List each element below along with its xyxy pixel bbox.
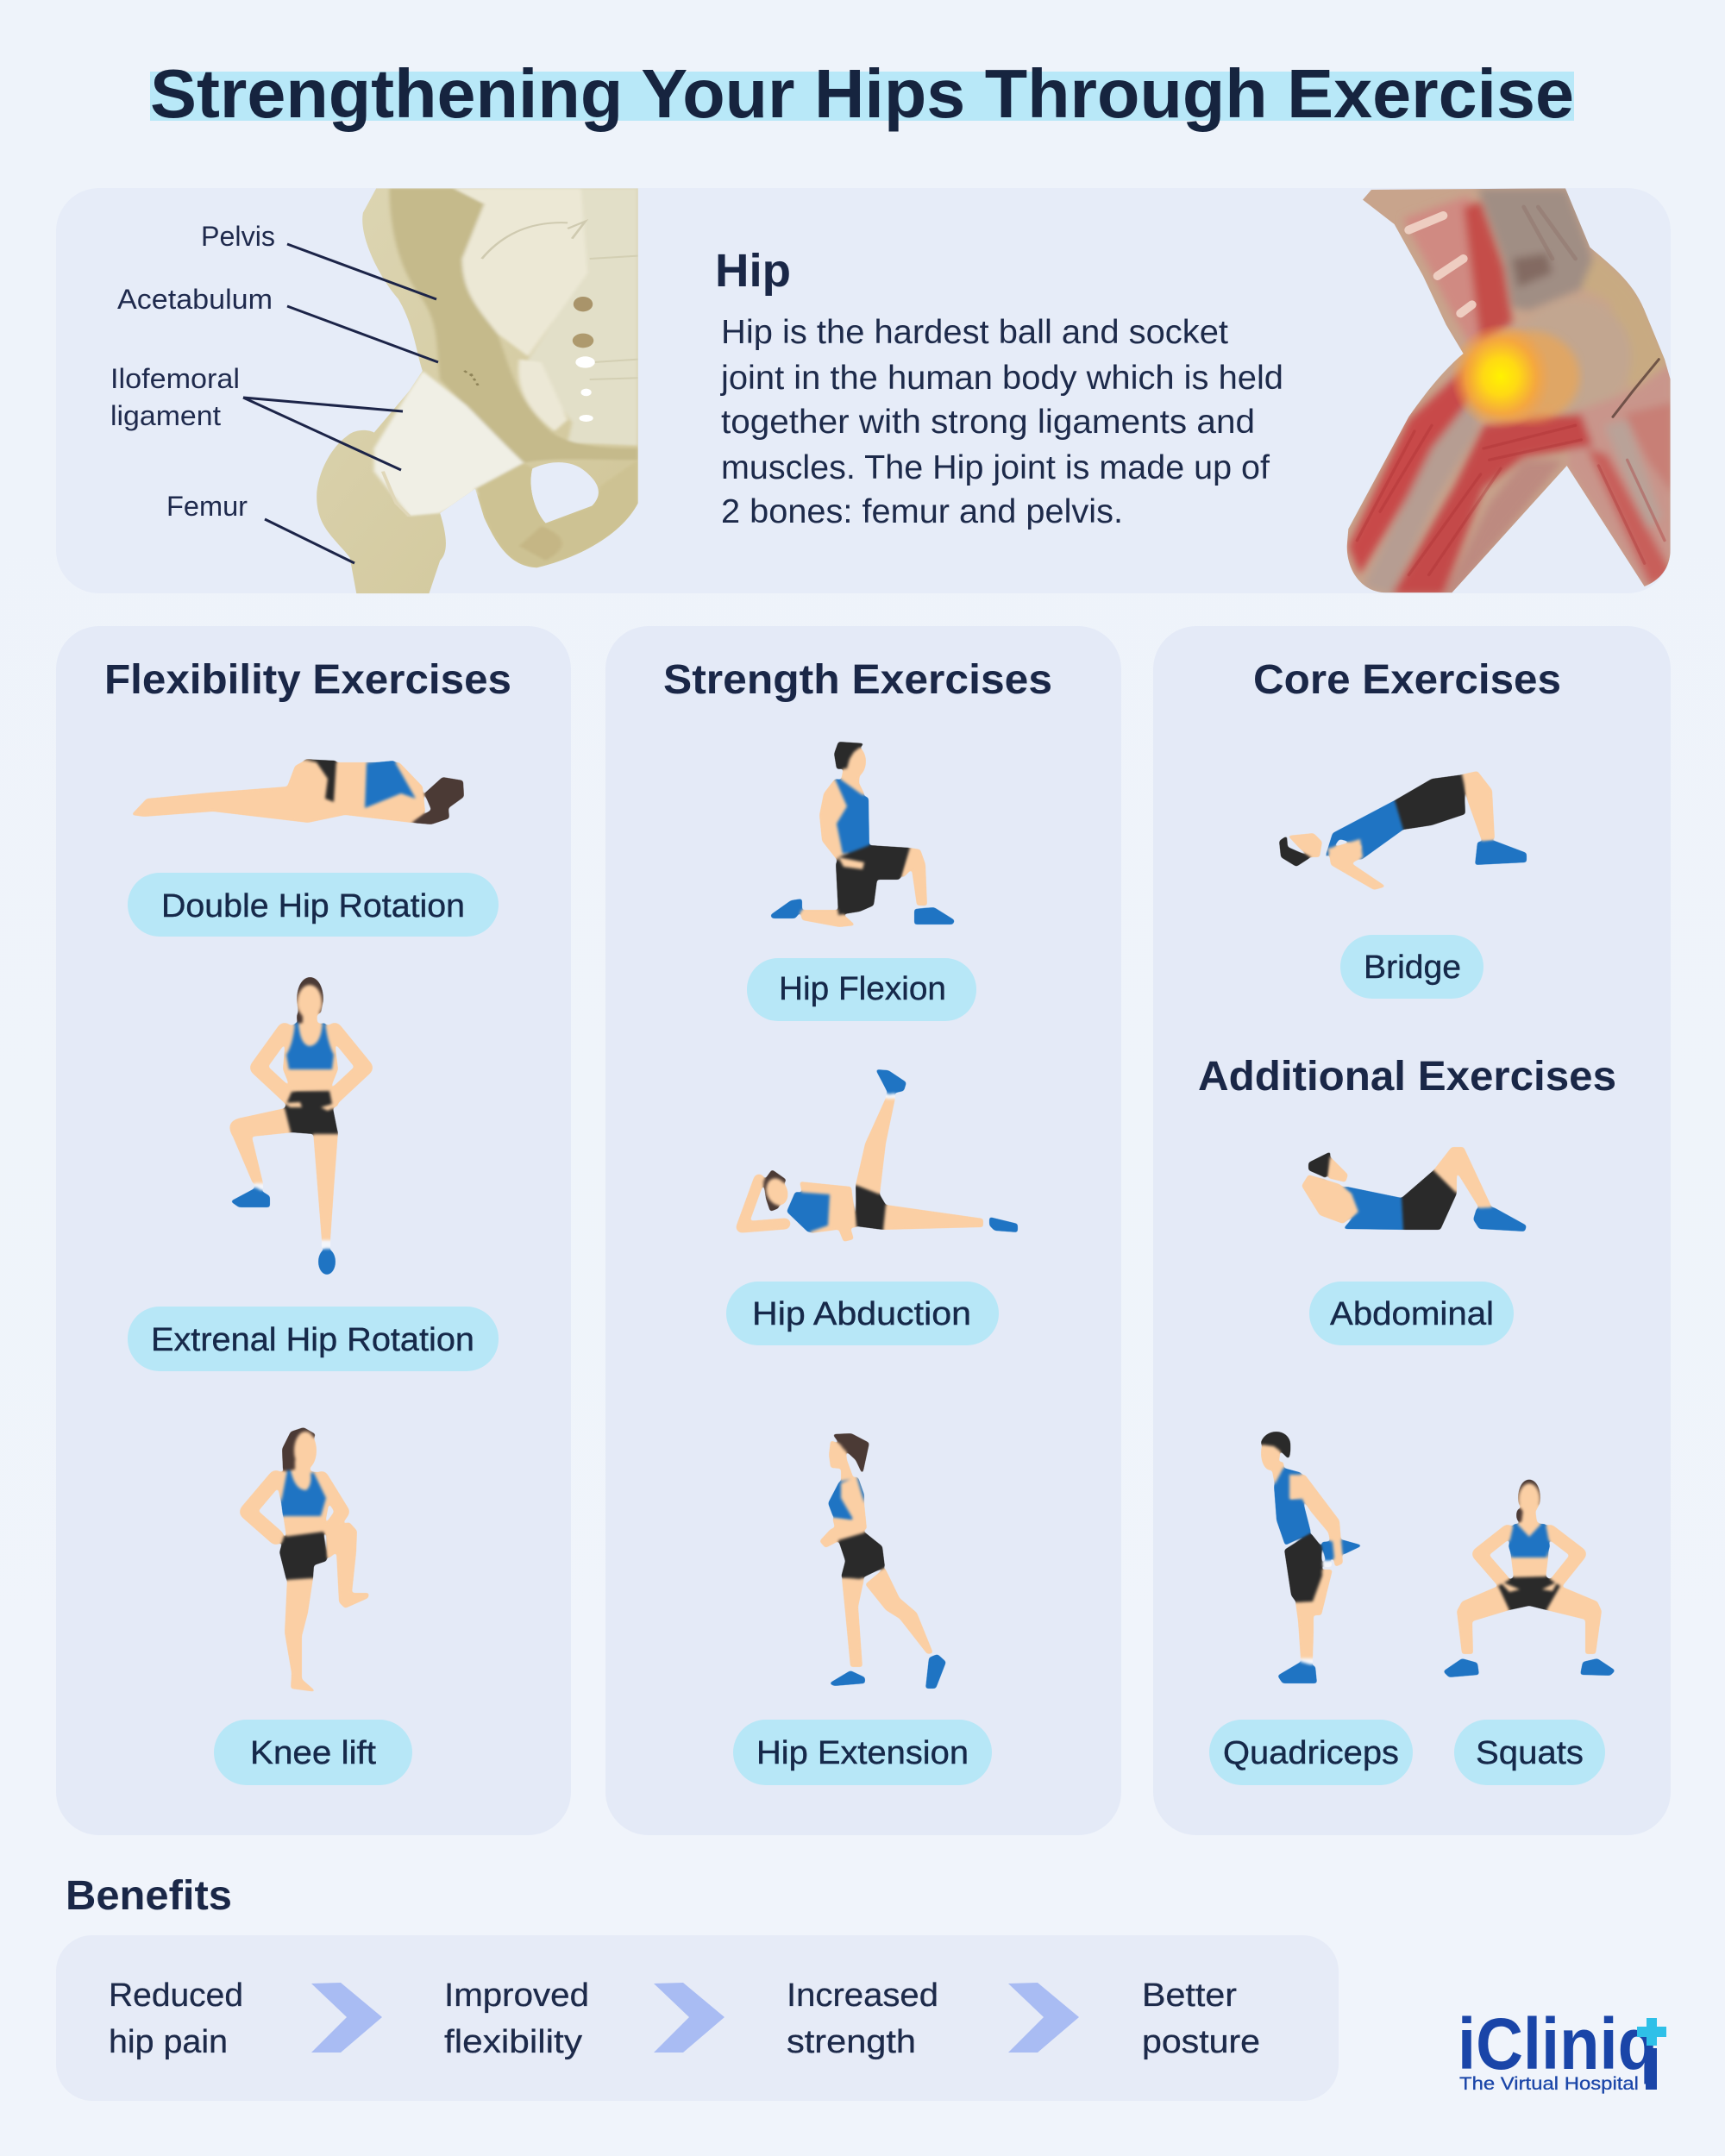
pill: Knee lift: Knee lift <box>250 1735 376 1771</box>
figure: quadriceps stretch <box>1261 1432 1363 1683</box>
panel: flexibility exercises <box>56 626 571 1835</box>
heading: Strength Exercises: Strength Exercises <box>663 657 1052 703</box>
panel: strength exercises <box>605 626 1121 1835</box>
panel: benefits flow <box>56 1935 1339 2101</box>
figure: external hip rotation <box>229 977 365 1275</box>
benefit: reduced hip pain: hip pain <box>109 2024 228 2060</box>
benefit: increased strength <box>787 1977 938 2060</box>
pill: Double Hip Rotation: Double Hip Rotation <box>161 888 465 924</box>
benefit: better posture: posture <box>1142 2024 1260 2060</box>
pill: Hip Abduction: Hip Abduction <box>752 1296 971 1332</box>
benefit: reduced hip pain <box>109 1977 243 2060</box>
pill: Squats: Squats <box>1476 1735 1584 1771</box>
heading: Core Exercises: Core Exercises <box>1253 657 1561 703</box>
benefit: better posture <box>1142 1977 1260 2060</box>
benefit: increased strength: strength <box>787 2024 916 2060</box>
pill: Bridge <box>1340 935 1484 999</box>
arrow <box>1008 1983 1079 2053</box>
pill: Bridge: Bridge <box>1364 950 1461 986</box>
pill: Extrenal Hip Rotation <box>128 1307 499 1371</box>
leader lines <box>243 244 438 563</box>
pill: Hip Flexion: Hip Flexion <box>779 971 946 1007</box>
benefit: improved flexibility: Improved <box>444 1977 589 2014</box>
label: Femur: Femur <box>166 491 248 522</box>
benefit: reduced hip pain: Reduced <box>109 1977 243 2014</box>
pill: Quadriceps: Quadriceps <box>1223 1735 1399 1771</box>
figure: abdominal crunch <box>1302 1147 1527 1232</box>
text: hip description <box>720 314 1283 530</box>
figure: squats <box>1443 1480 1615 1677</box>
benefit: improved flexibility: flexibility <box>444 2024 582 2060</box>
benefit: increased strength: Increased <box>787 1977 938 2014</box>
panel: hip overview <box>56 184 1682 598</box>
label: Ilofemoral ligament: Ilofemoral <box>110 363 240 394</box>
pill: Hip Extension: Hip Extension <box>756 1735 969 1771</box>
text: hip description: muscles. The Hip joint is made up of <box>721 449 1270 486</box>
label: Ilofemoral ligament <box>110 363 240 431</box>
pill: Squats <box>1454 1720 1605 1785</box>
figure: hip flexion <box>770 742 955 927</box>
label: Acetabulum: Acetabulum <box>117 284 273 315</box>
heading: Hip: Hip <box>715 245 791 297</box>
figure: knee lift <box>248 1427 369 1692</box>
text: hip description: together with strong ligaments and <box>721 404 1255 441</box>
pill: Extrenal Hip Rotation: Extrenal Hip Rotation <box>151 1322 474 1358</box>
pill: Abdominal: Abdominal <box>1330 1296 1494 1332</box>
heading: Flexibility Exercises: Flexibility Exercises <box>104 657 511 703</box>
figure: hip abduction <box>742 1069 1018 1242</box>
logo: iCliniq: The Virtual Hospital <box>1459 2074 1639 2094</box>
pill: Quadriceps <box>1209 1720 1413 1785</box>
arrow <box>654 1983 724 2053</box>
figure: hip extension <box>819 1433 946 1689</box>
text: hip description: 2 bones: femur and pelvis. <box>721 493 1123 530</box>
panel: core and additional exercises <box>1153 626 1671 1835</box>
text: hip description: joint in the human body which is held <box>720 360 1283 397</box>
illustration: hip muscles with glowing joint <box>1337 184 1682 598</box>
figure: bridge <box>1279 771 1527 890</box>
pill: Double Hip Rotation <box>128 873 499 937</box>
pill: Hip Extension <box>733 1720 992 1785</box>
logo: iCliniq: iCliniq <box>1458 2003 1658 2084</box>
illustration: hip bones <box>308 184 643 598</box>
heading: Additional Exercises: Additional Exercises <box>1198 1054 1616 1100</box>
pill: Hip Abduction <box>726 1282 999 1345</box>
text: hip description: Hip is the hardest ball and socket <box>721 314 1228 351</box>
figure: lying double hip rotation <box>131 759 464 824</box>
arrow <box>311 1983 382 2053</box>
benefit: better posture: Better <box>1142 1977 1237 2014</box>
pill: Knee lift <box>214 1720 412 1785</box>
pill: Hip Flexion <box>747 958 976 1021</box>
label: Pelvis: Pelvis <box>201 221 275 252</box>
pill: Abdominal <box>1309 1282 1514 1345</box>
heading: Benefits: Benefits <box>66 1873 232 1919</box>
benefit: improved flexibility <box>444 1977 589 2060</box>
label: Ilofemoral ligament: ligament <box>110 400 221 431</box>
title: Strengthening Your Hips Through Exercise <box>150 55 1574 132</box>
